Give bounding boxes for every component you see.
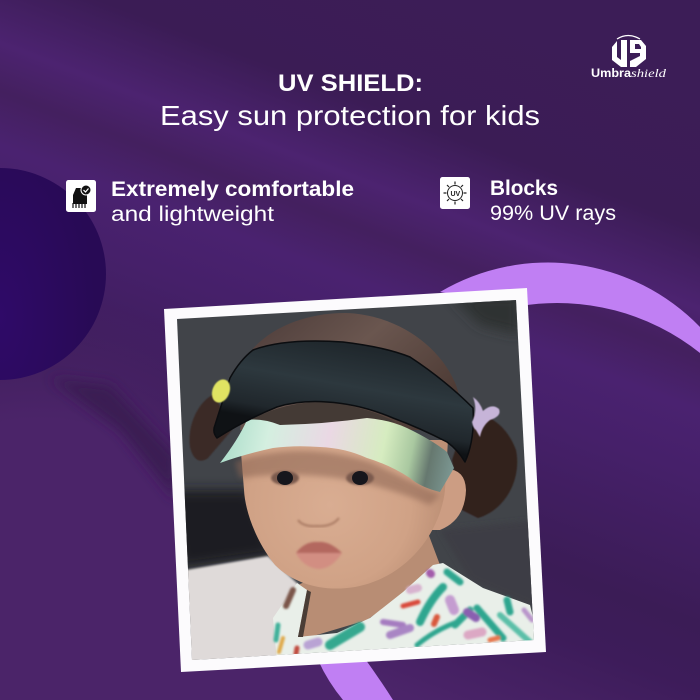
feature text: Extremely comfortable (111, 178, 354, 201)
logo wordmark: Umbra (591, 68, 632, 80)
title (160, 70, 540, 131)
icon: UV sun (440, 177, 470, 209)
iridescent visor (220, 418, 454, 492)
feature: UV block (440, 177, 616, 225)
face (240, 440, 448, 589)
nose (298, 518, 339, 526)
icon: UV sun: UV (450, 191, 461, 198)
decorative lilac ring: lower arc (318, 656, 393, 700)
photo: child wearing UV visor (170, 295, 540, 668)
logo (591, 36, 667, 80)
decorative dark circle (0, 168, 106, 380)
eyes (271, 471, 374, 485)
photo backdrop (170, 295, 540, 668)
logo wordmark: shield (631, 66, 667, 80)
feature text (490, 177, 616, 225)
scrunchie: lilac (472, 397, 500, 437)
ear (432, 470, 466, 530)
lips (296, 542, 342, 569)
logo mark (612, 36, 646, 67)
feature text (111, 178, 354, 226)
feature: comfortable (66, 178, 354, 226)
scrunchie: yellow (211, 378, 231, 404)
hair (240, 313, 470, 430)
neck (299, 536, 440, 636)
decorative lilac ring: upper arc (440, 263, 700, 353)
photo frame (164, 288, 546, 672)
feature text: and lightweight (111, 203, 274, 226)
logo wordmark (591, 66, 667, 80)
shirt (273, 563, 540, 662)
pigtails (190, 394, 517, 518)
feature text: Blocks (490, 177, 558, 200)
feature text: 99% UV rays (490, 202, 616, 225)
title line 2: Easy sun protection for kids (160, 100, 540, 131)
visor underside (252, 402, 394, 425)
visor fabric band (214, 341, 473, 462)
visor shadow on forehead (235, 451, 440, 505)
icon: lightweight badge (66, 180, 96, 212)
title line 1: UV SHIELD: (278, 70, 423, 97)
